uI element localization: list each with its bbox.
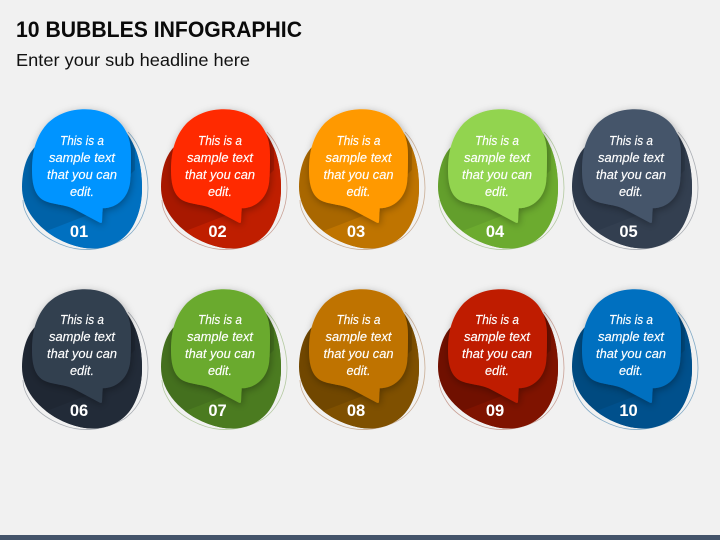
- bubble 06: edit.: [70, 364, 94, 378]
- bubble 03: This is a: [336, 134, 381, 148]
- bubble 07: edit.: [208, 364, 232, 378]
- bubble 02: This is a: [198, 134, 242, 148]
- bubble 03: [299, 109, 427, 255]
- bubble 05: This is a: [609, 134, 653, 148]
- bubble 06: This is a: [60, 313, 104, 327]
- bubble 05: that you can: [596, 168, 666, 182]
- bubble 04: sample text: [464, 151, 531, 165]
- bubble 02: edit.: [208, 185, 232, 199]
- bubble 03: sample text: [326, 151, 392, 165]
- bubble 09: This is a: [475, 313, 519, 327]
- bubble 01: sample text: [49, 151, 116, 165]
- bubble 10: [572, 289, 700, 435]
- bubble 01: that you can: [47, 168, 117, 182]
- bubble 04: [438, 109, 566, 255]
- bubble 03: that you can: [324, 168, 394, 182]
- bubble 05: [572, 109, 700, 255]
- footer bar: [0, 535, 720, 540]
- bubble 10: that you can: [596, 347, 666, 361]
- bubble 09: that you can: [462, 347, 532, 361]
- bubble 01: 01: [70, 223, 88, 241]
- bubble 08: 08: [347, 402, 365, 420]
- bubble 07: This is a: [198, 313, 242, 327]
- bubble 02: sample text: [187, 151, 254, 165]
- sub headline: Enter your sub headline here: [16, 50, 250, 70]
- bubble 07: that you can: [185, 347, 255, 361]
- bubble 07: [161, 289, 289, 435]
- bubble 09: 09: [486, 402, 504, 420]
- bubble 08: sample text: [326, 330, 392, 344]
- bubble 06: 06: [70, 402, 88, 420]
- bubble 01: [22, 109, 150, 255]
- bubble 03: 03: [347, 223, 365, 241]
- bubble 05: sample text: [598, 151, 665, 165]
- bubble 01: This is a: [60, 134, 104, 148]
- bubble 09: [438, 289, 566, 435]
- bubble 02: that you can: [185, 168, 255, 182]
- bubble 05: 05: [619, 223, 638, 241]
- bubble 04: edit.: [485, 185, 509, 199]
- bubble 10: This is a: [609, 313, 653, 327]
- title: 10 BUBBLES INFOGRAPHIC: [16, 17, 302, 42]
- bubble 10: edit.: [619, 364, 643, 378]
- bubble 06: that you can: [47, 347, 117, 361]
- bubble 08: edit.: [346, 364, 370, 378]
- bubble 03: edit.: [346, 185, 370, 199]
- bubble 10: sample text: [598, 330, 665, 344]
- bubble 04: 04: [486, 223, 505, 241]
- bubble 09: edit.: [485, 364, 509, 378]
- bubble 06: sample text: [49, 330, 116, 344]
- bubble 04: that you can: [462, 168, 532, 182]
- bubble 08: [299, 289, 427, 435]
- bubble 06: [22, 289, 150, 435]
- bubble 04: This is a: [475, 134, 519, 148]
- bubble 07: sample text: [187, 330, 254, 344]
- bubble 10: 10: [619, 402, 638, 420]
- bubble 08: that you can: [324, 347, 394, 361]
- bubble 01: edit.: [70, 185, 94, 199]
- bubble 02: 02: [208, 223, 227, 241]
- bubble 07: 07: [208, 402, 227, 420]
- bubble 09: sample text: [464, 330, 531, 344]
- bubble 08: This is a: [336, 313, 381, 327]
- bubble 05: edit.: [619, 185, 643, 199]
- bubble 02: [161, 109, 289, 255]
